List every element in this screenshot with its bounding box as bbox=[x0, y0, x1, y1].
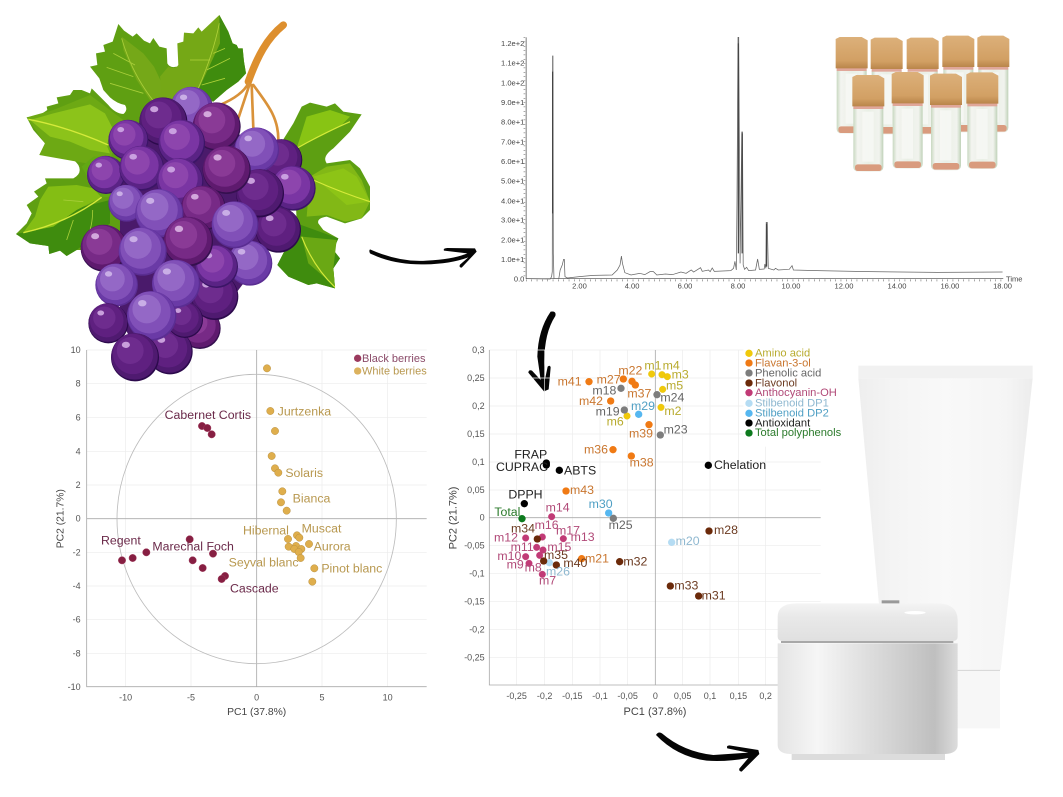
legend: metabolite classes: Stilbenoid DP2 bbox=[755, 408, 829, 420]
scatter plot: grape varieties PCA: Bianca bbox=[293, 492, 331, 506]
leaves: right side of the bunch bbox=[160, 15, 370, 288]
cosmetic tube bbox=[858, 366, 1033, 728]
scatter plot: metabolites PCA: m11 bbox=[511, 540, 534, 554]
legend: metabolite classes: Stilbenoid DP1 bbox=[755, 398, 829, 410]
scatter plot: metabolites PCA: m26 bbox=[546, 565, 570, 579]
scatter plot: metabolites PCA: m43 bbox=[570, 483, 594, 497]
scatter plot: grape varieties PCA: 10 bbox=[383, 693, 393, 703]
scatter plot: grape varieties PCA: Cabernet Cortis bbox=[165, 408, 251, 422]
scatter plot: metabolites PCA: 0 bbox=[653, 691, 658, 701]
scatter plot: metabolites PCA: 0,2 bbox=[759, 691, 772, 701]
legend: metabolite classes: Phenolic acid bbox=[755, 367, 821, 379]
scatter plot: metabolites PCA: ABTS bbox=[564, 463, 596, 477]
scatter plot: metabolites PCA: DPPH bbox=[508, 488, 543, 502]
scatter plot: metabolites PCA: m30 bbox=[589, 497, 613, 511]
scatter plot: metabolites PCA: m10 bbox=[497, 549, 521, 563]
legend: metabolite classes: Total polyphenols bbox=[755, 427, 842, 439]
chromatogram: 1.2e+2 bbox=[501, 39, 524, 48]
chromatogram: 1.1e+2 bbox=[501, 59, 524, 68]
scatter plot: grape varieties PCA: Black berries bbox=[362, 353, 426, 365]
scatter plot: metabolites PCA: m23 bbox=[664, 423, 688, 437]
chromatogram: 4.0e+1 bbox=[501, 196, 524, 205]
scatter plot: grape varieties PCA: 6 bbox=[76, 412, 81, 422]
scatter plot: grape varieties PCA: -6 bbox=[73, 615, 81, 625]
scatter plot: grape varieties PCA: 0 bbox=[254, 693, 259, 703]
chromatogram: 12.00 bbox=[835, 282, 853, 291]
scatter plot: metabolites PCA: m41 bbox=[558, 375, 582, 389]
scatter plot: metabolites PCA: m21 bbox=[585, 552, 609, 566]
chromatogram: 10.00 bbox=[782, 282, 800, 291]
scatter plot: metabolites PCA: m22 bbox=[618, 363, 642, 377]
scatter plot: metabolites PCA: -0,25 bbox=[506, 691, 527, 701]
scatter plot: grape varieties PCA: -10 bbox=[68, 682, 81, 692]
scatter plot: metabolites PCA: m36 bbox=[584, 443, 608, 457]
chromatogram: 18.00 bbox=[993, 282, 1012, 291]
scatter plot: metabolites PCA: 0 bbox=[480, 513, 485, 523]
scatter plot: metabolites PCA: m13 bbox=[571, 530, 595, 544]
scatter plot: metabolites PCA: m37 bbox=[627, 386, 651, 400]
scatter plot: metabolites PCA: m29 bbox=[631, 399, 655, 413]
chromatogram: 2.00 bbox=[572, 282, 587, 291]
scatter plot: grape varieties PCA: Pinot blanc bbox=[321, 561, 382, 575]
scatter plot: metabolites PCA: m14 bbox=[546, 500, 570, 514]
chromatogram: 4.00 bbox=[625, 282, 639, 291]
arrow: metabolite plot to cosmetic products bbox=[656, 732, 759, 772]
scatter plot: grape varieties PCA: -10 bbox=[119, 693, 132, 703]
scatter plot: metabolites PCA: m17 bbox=[556, 523, 580, 537]
scatter plot: metabolites PCA: PC1 (37.8%) bbox=[624, 706, 686, 718]
scatter plot: metabolites PCA: -0,05 bbox=[617, 691, 638, 701]
scatter plot: metabolites PCA: m12 bbox=[494, 531, 518, 545]
leaves: left side of the bunch bbox=[16, 24, 197, 256]
scatter plot: metabolites PCA: m42 bbox=[579, 394, 603, 408]
chromatogram: 9.0e+1 bbox=[501, 98, 524, 107]
cream jar bbox=[778, 600, 958, 760]
scatter plot: metabolites PCA: m15 bbox=[547, 540, 571, 554]
scatter plot: grape varieties PCA: 5 bbox=[319, 693, 324, 703]
scatter plot: metabolites PCA: PC2 (21.7%) bbox=[448, 487, 460, 549]
scatter plot: metabolites PCA: -0,1 bbox=[469, 569, 485, 579]
scatter plot: metabolites PCA: m25 bbox=[609, 518, 633, 532]
scatter plot: metabolites PCA: Total bbox=[494, 505, 520, 519]
chromatogram: Time bbox=[1006, 274, 1023, 283]
scatter plot: grape varieties PCA: -5 bbox=[187, 693, 195, 703]
scatter plot: metabolites PCA: -0,05 bbox=[464, 541, 485, 551]
scatter plot: metabolites PCA: -0,2 bbox=[537, 691, 552, 701]
scatter plot: metabolites PCA: 0,3 bbox=[472, 345, 485, 355]
scatter plot: metabolites PCA: Chelation bbox=[714, 458, 766, 472]
scatter plot: metabolites PCA: m24 bbox=[660, 390, 684, 404]
legend: metabolite classes bbox=[745, 348, 842, 439]
scatter plot: metabolites PCA: m18 bbox=[592, 383, 616, 397]
chromatogram bbox=[501, 37, 1023, 291]
scatter plot: grape varieties PCA: Solaris bbox=[285, 466, 323, 480]
scatter plot: metabolites PCA: 0,15 bbox=[730, 691, 747, 701]
scatter plot: metabolites PCA: CUPRAC bbox=[496, 460, 548, 474]
grape stem bbox=[220, 25, 283, 139]
scatter plot: grape varieties PCA: Muscat bbox=[302, 521, 342, 535]
chromatogram: 6.00 bbox=[678, 282, 692, 291]
chromatogram: 2.0e+1 bbox=[501, 235, 524, 244]
arrow: chromatogram to metabolite plot bbox=[528, 312, 556, 391]
scatter plot: grape varieties PCA: 8 bbox=[76, 379, 81, 389]
scatter plot: grape varieties PCA: Aurora bbox=[314, 540, 351, 554]
scatter plot: grape varieties PCA: PC1 (37.8%) bbox=[227, 707, 286, 718]
scatter plot: metabolites PCA: m6 bbox=[607, 414, 624, 428]
scatter plot: metabolites PCA: m5 bbox=[666, 378, 683, 392]
scatter plot: metabolites PCA: 0,25 bbox=[467, 373, 485, 383]
scatter plot: metabolites PCA: m35 bbox=[544, 548, 568, 562]
legend: metabolite classes: Anthocyanin-OH bbox=[755, 387, 837, 399]
scatter plot: metabolites PCA: 0,2 bbox=[472, 401, 485, 411]
scatter plot: metabolites PCA: m38 bbox=[630, 455, 654, 469]
scatter plot: metabolites PCA: m3 bbox=[672, 367, 689, 381]
scatter plot: metabolites PCA: m27 bbox=[597, 372, 621, 386]
scatter plot: metabolites PCA: -0,15 bbox=[464, 596, 485, 606]
scatter plot: metabolites PCA: 0,1 bbox=[704, 691, 716, 701]
scatter plot: grape varieties PCA: PC2 (21.7%) bbox=[55, 489, 66, 548]
scatter plot: grape varieties PCA: 4 bbox=[76, 446, 81, 456]
legend: metabolite classes: Flavonol bbox=[755, 377, 797, 389]
scatter plot: grape varieties PCA: -2 bbox=[73, 547, 81, 557]
scatter plot: metabolites PCA bbox=[448, 340, 853, 718]
scatter plot: grape varieties PCA: 2 bbox=[76, 480, 81, 490]
chromatogram: 1.0e+2 bbox=[501, 78, 524, 87]
chromatogram: 16.00 bbox=[940, 282, 959, 291]
scatter plot: grape varieties PCA: 10 bbox=[71, 345, 81, 355]
chromatogram: 6.0e+1 bbox=[501, 157, 524, 166]
scatter plot: metabolites PCA: m2 bbox=[664, 404, 682, 418]
scatter plot: grape varieties PCA: 0 bbox=[76, 514, 81, 524]
scatter plot: metabolites PCA: m32 bbox=[623, 555, 647, 569]
legend: metabolite classes: Flavan-3-ol bbox=[755, 357, 811, 369]
scatter plot: grape varieties PCA: White berries bbox=[362, 366, 427, 378]
chromatogram: 14.00 bbox=[887, 282, 906, 291]
scatter plot: metabolites PCA: m4 bbox=[663, 358, 680, 372]
scatter plot: grape varieties PCA: -4 bbox=[73, 581, 81, 591]
legend: metabolite classes: Amino acid bbox=[755, 348, 810, 360]
chromatogram: 8.0e+1 bbox=[501, 118, 524, 127]
scatter plot: grape varieties PCA: Regent bbox=[101, 533, 141, 547]
scatter plot: grape varieties PCA: -8 bbox=[73, 648, 81, 658]
scatter plot: metabolites PCA: m40 bbox=[563, 556, 587, 570]
scatter plot: metabolites PCA: m33 bbox=[674, 578, 698, 592]
scatter plot: metabolites PCA: m39 bbox=[629, 426, 653, 440]
glass vials with wooden caps bbox=[836, 36, 1009, 172]
scatter plot: grape varieties PCA: Seyval blanc bbox=[229, 556, 299, 570]
legend backdrop bbox=[743, 340, 853, 447]
bunch of purple grapes bbox=[81, 87, 316, 381]
scatter plot: metabolites PCA: m31 bbox=[702, 589, 726, 603]
scatter plot: metabolites PCA: m34 bbox=[511, 522, 535, 536]
scatter plot: metabolites PCA: -0,1 bbox=[592, 691, 608, 701]
scatter plot: metabolites PCA: 0,1 bbox=[472, 457, 485, 467]
scatter plot: metabolites PCA: m8 bbox=[525, 561, 542, 575]
chromatogram: 3.0e+1 bbox=[501, 216, 524, 225]
scatter plot: grape varieties PCA: Jurtzenka bbox=[278, 405, 331, 419]
scatter plot: metabolites PCA: 0,15 bbox=[467, 429, 485, 439]
chromatogram: 0.0 bbox=[514, 274, 524, 283]
scatter plot: metabolites PCA: -0,15 bbox=[562, 691, 583, 701]
legend: metabolite classes: Antioxidant bbox=[755, 417, 811, 429]
scatter plot: metabolites PCA: -0,25 bbox=[464, 652, 485, 662]
arrow: grapes to chromatogram bbox=[369, 248, 477, 268]
chromatogram: 5.0e+1 bbox=[501, 177, 524, 186]
chromatogram: 1.0e+1 bbox=[501, 255, 524, 264]
scatter plot: metabolites PCA: FRAP bbox=[514, 447, 547, 461]
scatter plot: grape varieties PCA bbox=[55, 345, 427, 718]
scatter plot: metabolites PCA: m20 bbox=[676, 534, 700, 548]
scatter plot: metabolites PCA: m16 bbox=[535, 518, 559, 532]
scatter plot: grape varieties PCA: Cascade bbox=[230, 581, 279, 595]
scatter plot: metabolites PCA: 0,05 bbox=[674, 691, 691, 701]
chromatogram: 7.0e+1 bbox=[501, 137, 524, 146]
scatter plot: grape varieties PCA: Hibernal bbox=[243, 524, 289, 538]
scatter plot: metabolites PCA: m1 bbox=[644, 358, 662, 372]
scatter plot: metabolites PCA: m9 bbox=[507, 557, 524, 571]
scatter plot: metabolites PCA: -0,2 bbox=[469, 624, 485, 634]
scatter plot: grape varieties PCA: Marechal Foch bbox=[152, 539, 234, 553]
scatter plot: metabolites PCA: m19 bbox=[596, 405, 620, 419]
scatter plot: metabolites PCA: m28 bbox=[714, 523, 738, 537]
scatter plot: metabolites PCA: m7 bbox=[539, 573, 556, 587]
chromatogram: 8.00 bbox=[731, 282, 745, 291]
scatter plot: metabolites PCA: 0,05 bbox=[467, 485, 485, 495]
